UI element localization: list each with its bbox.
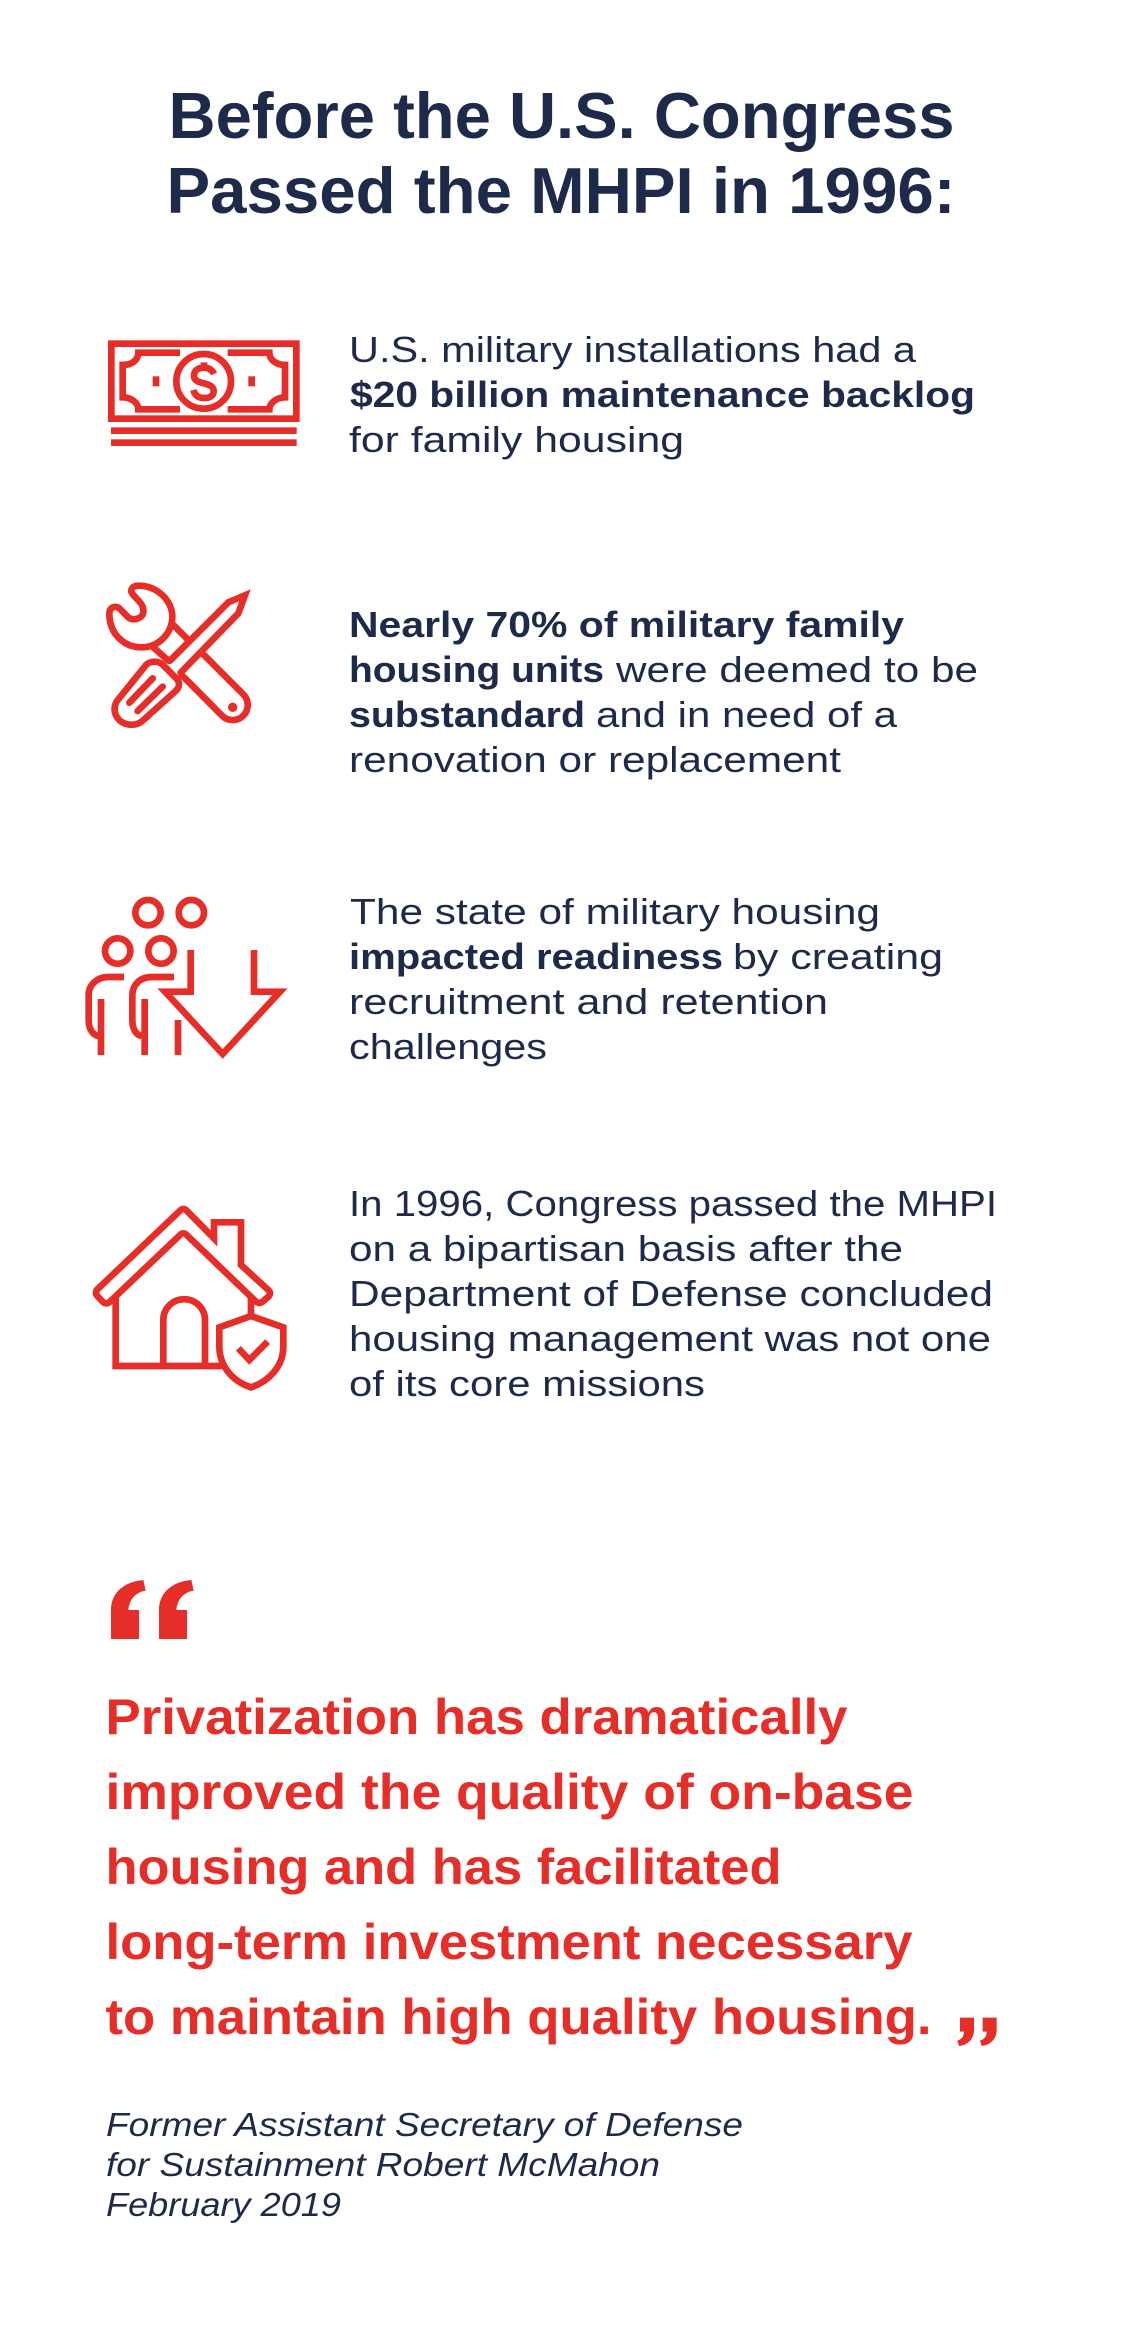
text block: backlog: U.S. military installations had a (349, 329, 917, 370)
icon: people with down arrow (89, 900, 280, 1055)
title: Before the U.S. Congress (168, 79, 954, 152)
quote text: long-term investment necessary (106, 1914, 913, 1970)
text block: MHPI: In 1996, Congress passed the MHPI (349, 1183, 997, 1224)
icon: closing quotation mark (957, 2018, 997, 2046)
text block: MHPI: housing management was not one (349, 1318, 991, 1359)
panel: substandard housing (109, 586, 978, 780)
icon: opening quotation mark (111, 1580, 194, 1639)
text block: substandard: renovation or replacement (349, 739, 841, 780)
text block: readiness: recruitment and retention (349, 981, 828, 1022)
text block: backlog: $20 billion maintenance backlog (350, 374, 975, 415)
attribution: February 2019 (106, 2186, 341, 2223)
title (166, 79, 955, 227)
text block: readiness: impacted readiness (349, 936, 723, 977)
text block: substandard: housing units (349, 649, 604, 690)
text block: MHPI: on a bipartisan basis after the (349, 1228, 903, 1269)
text block: MHPI: of its core missions (349, 1363, 705, 1404)
text block: readiness: The state of military housing (350, 891, 880, 932)
quote text: to maintain high quality housing. (106, 1989, 932, 2045)
title: Passed the MHPI in 1996: (166, 154, 955, 227)
text block: MHPI (349, 1183, 997, 1404)
text block: backlog (349, 329, 975, 460)
text block: substandard: Nearly 70% of military family (349, 604, 904, 645)
panel: MHPI passed (96, 1183, 997, 1404)
icon: house with shield (96, 1209, 283, 1387)
attribution (106, 2106, 743, 2223)
icon: money stack (111, 344, 297, 446)
icon: wrench and screwdriver (109, 586, 248, 725)
quote text: improved the quality of on-base (106, 1764, 914, 1820)
attribution: Former Assistant Secretary of Defense (106, 2106, 743, 2143)
attribution: for Sustainment Robert McMahon (106, 2146, 660, 2183)
quote text: housing and has facilitated (106, 1839, 781, 1895)
quote text (106, 1689, 932, 2045)
text block: substandard: substandard (349, 694, 585, 735)
text block: substandard: and in need of a (596, 694, 898, 735)
quote text: Privatization has dramatically (106, 1689, 848, 1745)
text block: MHPI: Department of Defense concluded (349, 1273, 993, 1314)
text block: backlog: for family housing (349, 419, 684, 460)
text block: readiness: challenges (349, 1026, 547, 1067)
text block: readiness (349, 891, 943, 1067)
text block: readiness: by creating (733, 936, 943, 977)
panel: maintenance backlog (111, 329, 975, 460)
panel: readiness (89, 891, 943, 1067)
text block: substandard (349, 604, 978, 780)
text block: substandard: were deemed to be (615, 649, 978, 690)
